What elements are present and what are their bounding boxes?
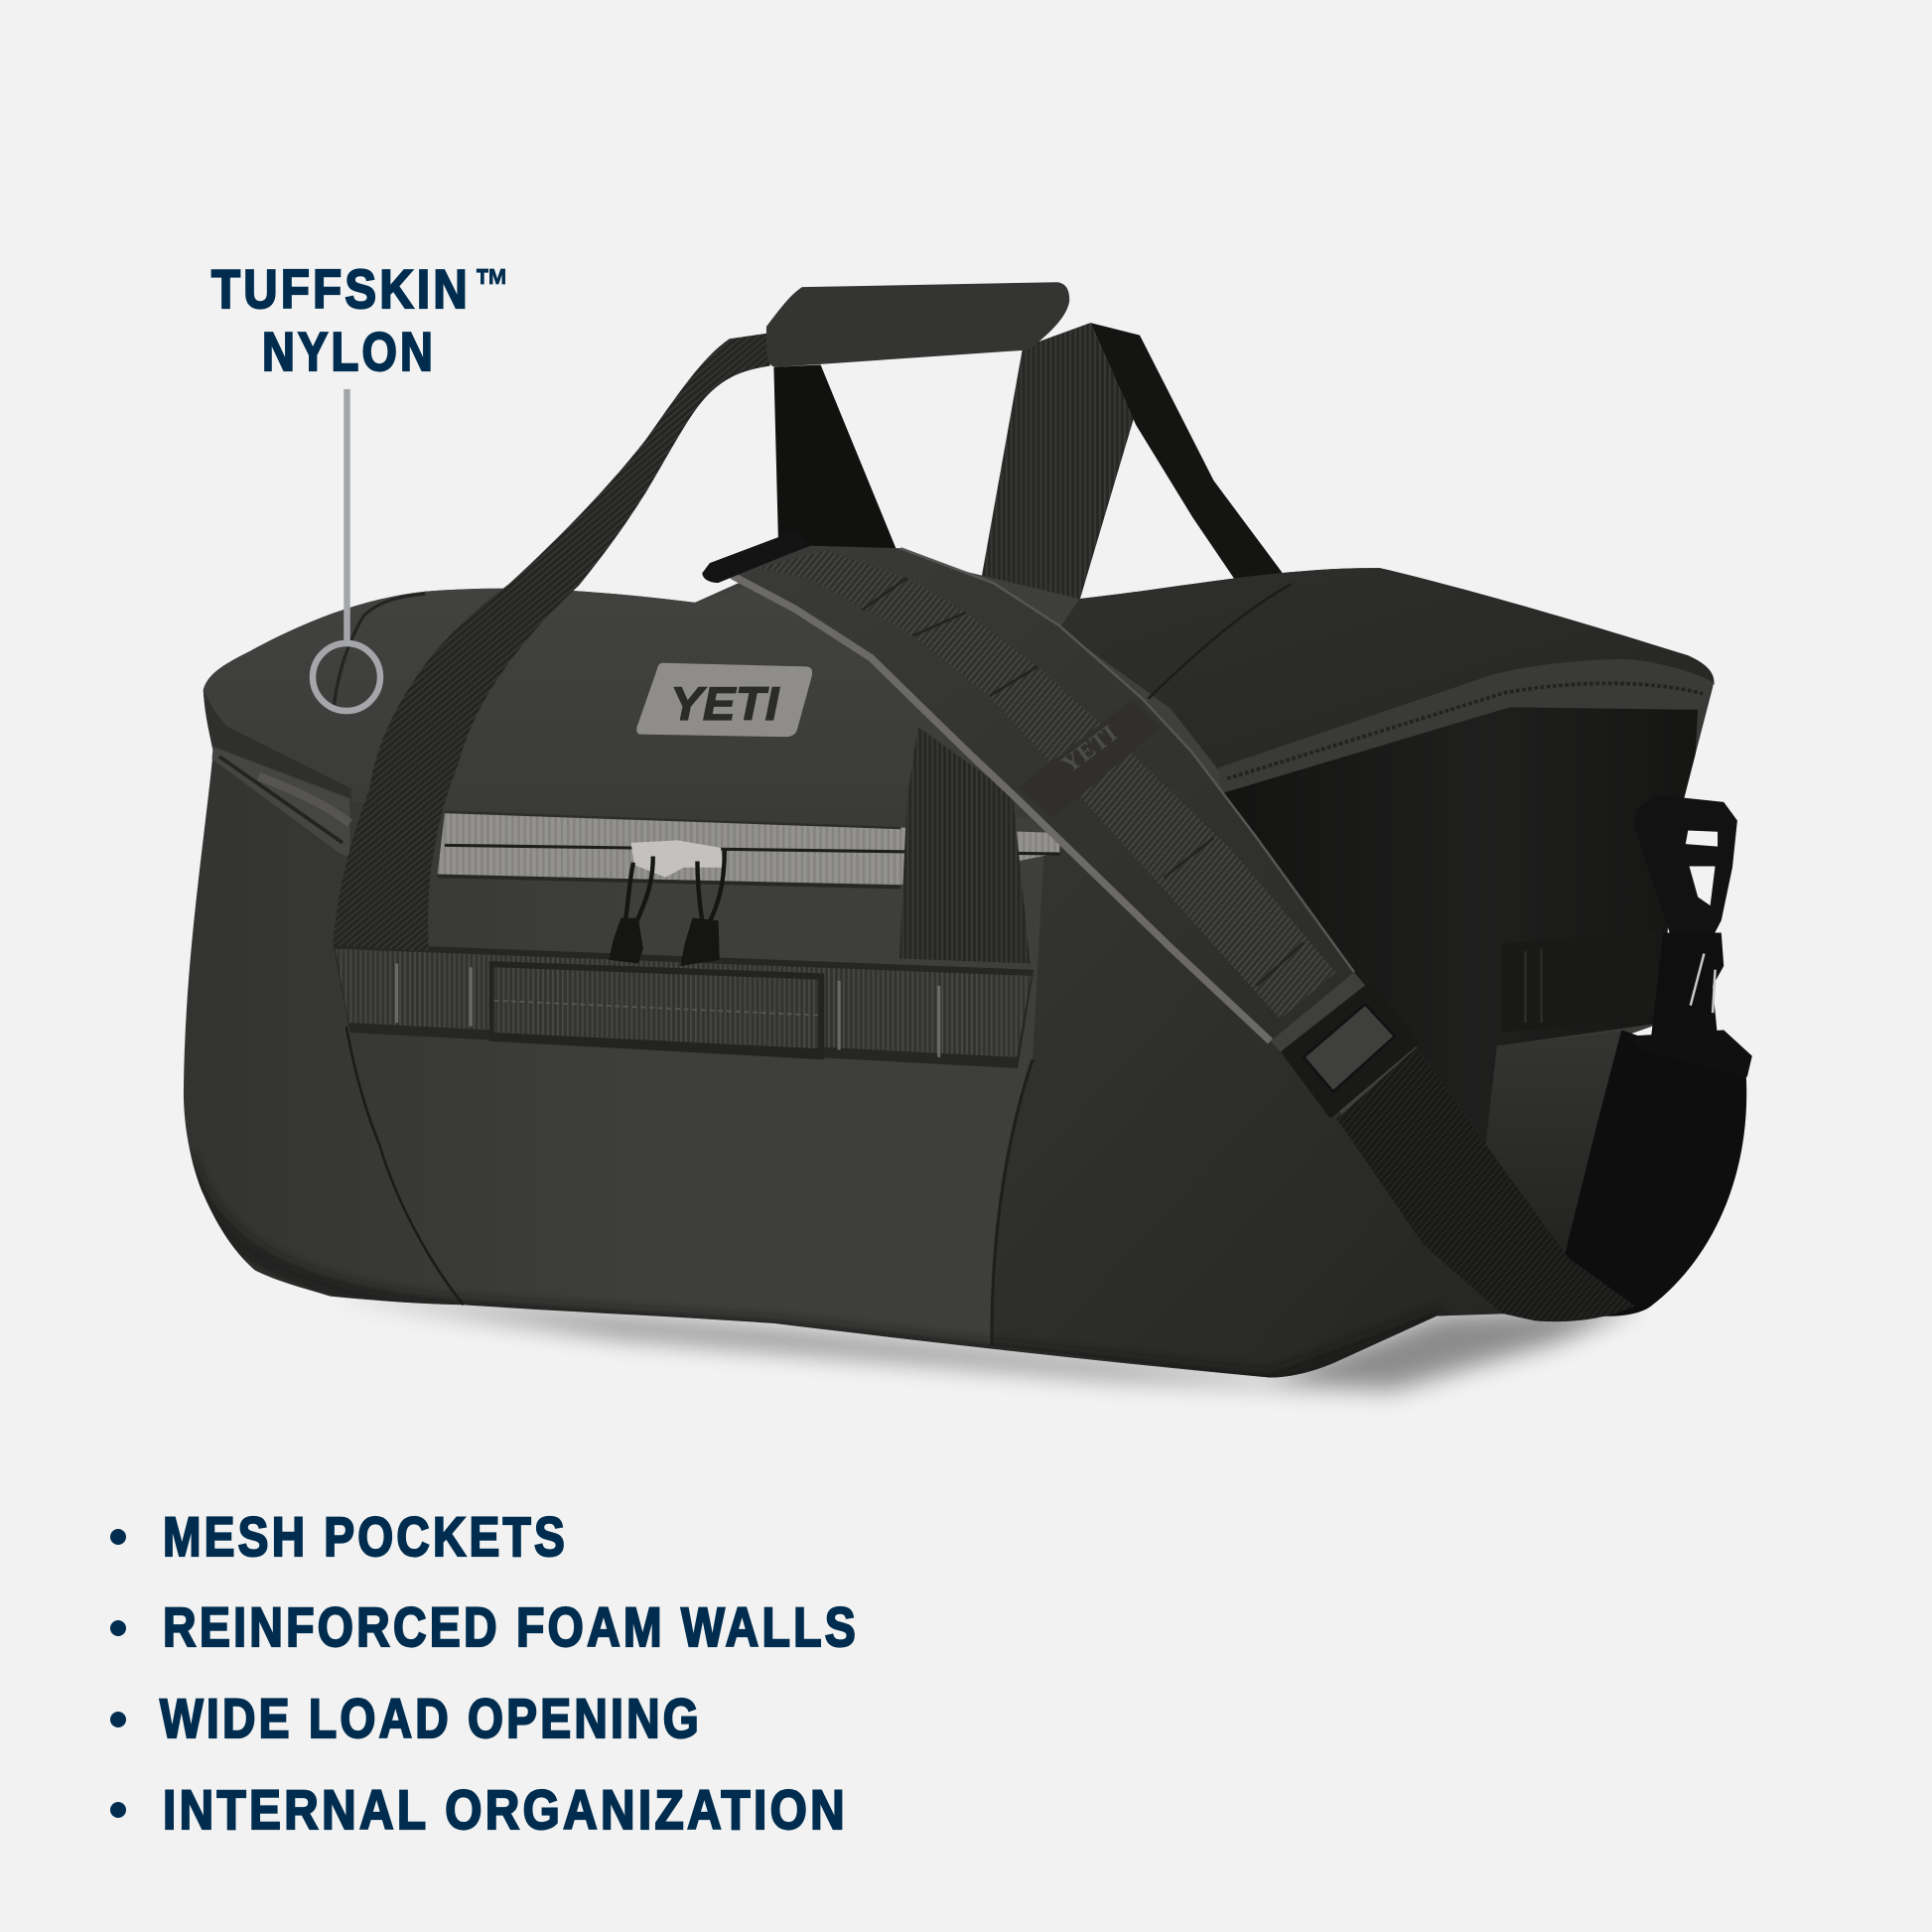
feature list	[110, 1505, 859, 1841]
left zipper band	[211, 747, 349, 858]
swivel clip	[1627, 794, 1752, 1077]
feature: internal organization: INTERNAL ORGANIZATION	[163, 1778, 848, 1841]
front strap right, lower section	[899, 727, 1031, 964]
left body seam	[346, 1027, 464, 1305]
right lid	[1059, 568, 1715, 770]
bag body	[184, 548, 1714, 1378]
shoulder strap pad: YETI	[1057, 720, 1123, 778]
grab handle	[489, 961, 824, 1059]
callout heading line 1: TUFFSKIN	[211, 258, 471, 320]
shoulder strap loop	[1540, 1031, 1746, 1316]
right side panel	[1221, 707, 1698, 1145]
front zipper	[438, 812, 1059, 888]
shoulder strap pad	[732, 546, 1354, 1041]
rear handle straps	[773, 323, 1289, 587]
right lid shoulder crease	[1149, 584, 1292, 699]
trademark mark: ™	[475, 260, 509, 313]
callout heading line 2: NYLON	[262, 321, 436, 382]
callout: TUFFSKIN nylon label	[211, 258, 509, 382]
lid lip	[204, 690, 351, 807]
strap YETI keeper	[1018, 700, 1161, 818]
YETI patch	[636, 663, 812, 737]
feature: reinforced foam walls: REINFORCED FOAM WALLS	[163, 1595, 859, 1658]
feature: wide load opening: WIDE LOAD OPENING	[160, 1687, 702, 1749]
right zipper band	[1218, 659, 1714, 793]
feature: mesh pockets: MESH POCKETS	[163, 1505, 568, 1568]
clip hook and swivel	[1651, 932, 1724, 1037]
side strap band	[1502, 930, 1662, 1033]
right body seam	[992, 1059, 1033, 1345]
product photo: duffel bag	[184, 282, 1752, 1390]
right lower body panel	[992, 813, 1516, 1378]
strap center webbing	[758, 551, 1335, 1019]
YETI patch: YETI	[670, 677, 779, 730]
top carry handle pad	[766, 282, 1069, 367]
front strap right, upper section	[981, 323, 1134, 634]
webbing band	[333, 942, 1034, 1068]
front lid	[204, 573, 1046, 828]
shoulder strap top buckle	[702, 531, 812, 583]
strap binding edge	[732, 576, 1271, 1041]
lid crease at callout	[334, 594, 425, 705]
shoulder strap lower section	[1337, 1047, 1635, 1321]
strap upper binding edge	[900, 548, 1354, 972]
zipper pulls	[609, 840, 725, 966]
ground shadow	[331, 1294, 1639, 1390]
clip D-ring	[1635, 794, 1737, 949]
front strap left	[333, 333, 771, 951]
callout leader line and ring	[313, 389, 380, 711]
bottom edge shading	[184, 1159, 1442, 1382]
clip bar	[1627, 1031, 1752, 1077]
right lower side panel	[1486, 1031, 1627, 1294]
strap adjuster buckle	[1284, 985, 1417, 1115]
